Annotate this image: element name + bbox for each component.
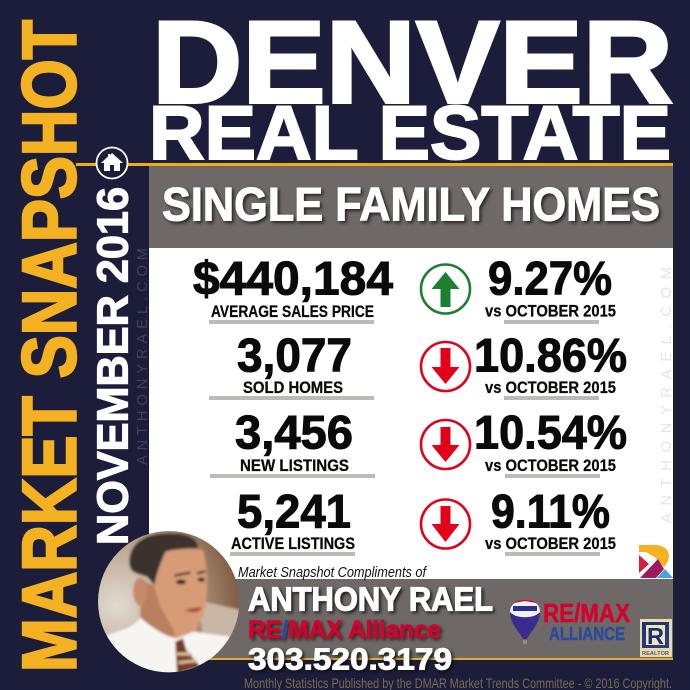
change row: +9.27%: 9.27% [488,252,612,304]
header band: single family homes: SINGLE FAMILY HOMES [162,178,660,230]
stat row: sold homes: 3,077 [237,328,352,382]
change row: -9.11% [421,484,616,556]
stat row: active listings: 5,241 [237,484,351,538]
stat row: sold homes: SOLD HOMES [243,379,343,397]
stat row: active listings [230,484,355,556]
agent brokerage: RE/MAX Alliance [248,616,441,644]
icon: DMAR logo [639,545,673,578]
vertical date: November 2016: NOVEMBER 2016 [88,187,138,545]
panel: white stats panel [149,248,673,580]
icon: house badge [96,148,128,178]
stat row: active listings: ACTIVE LISTINGS [231,535,355,553]
logo: RE/MAX Alliance [543,598,631,644]
agent phone: 303.520.3179 [248,642,452,676]
change row: -10.54%: 10.54% [474,406,627,458]
label: compliments line: Market Snapshot Compliments of [238,565,428,581]
stat row: average sales price: AVERAGE SALES PRICE [211,303,374,321]
title: Real Estate: REAL ESTATE [149,91,671,176]
logo: RE/MAX balloon [510,600,540,644]
header band: single family homes [149,166,673,248]
logo: RE/MAX Alliance: ALLIANCE [549,624,625,644]
change row: -10.86%: vs OCTOBER 2015 [485,379,616,397]
change row: +9.27%: vs OCTOBER 2015 [485,302,616,320]
change row: -10.86% [421,328,627,400]
divider: bottom gold rule [149,658,673,660]
title: Denver: DENVER [152,0,673,128]
stat row: average sales price: $440,184 [193,252,393,304]
divider: gold rule [76,163,673,166]
change row: -9.11%: vs OCTOBER 2015 [485,535,616,553]
logo: Realtor [640,619,672,657]
logo: Realtor: R [647,623,664,649]
change row: +9.27% [421,252,616,324]
vertical watermark: left: ANTHONYRAEL.COM [135,248,151,465]
agent name: ANTHONY RAEL [248,580,493,618]
change row: -10.86%: 10.86% [474,328,627,382]
change row: -10.54%: vs OCTOBER 2015 [485,457,616,475]
stat row: new listings [210,406,375,478]
vertical watermark: right: ANTHONYRAEL.COM [659,267,675,523]
change row: -10.54% [421,406,627,478]
agent photo [98,531,240,672]
stat row: new listings: NEW LISTINGS [240,457,349,475]
logo: Realtor: REALTOR [642,651,669,657]
stat row: sold homes [209,328,374,400]
stat row: new listings: 3,456 [235,406,353,458]
logo: RE/MAX Alliance: RE/MAX [543,598,631,628]
panel: agent band [149,579,673,658]
change row: -9.11%: 9.11% [491,484,610,538]
